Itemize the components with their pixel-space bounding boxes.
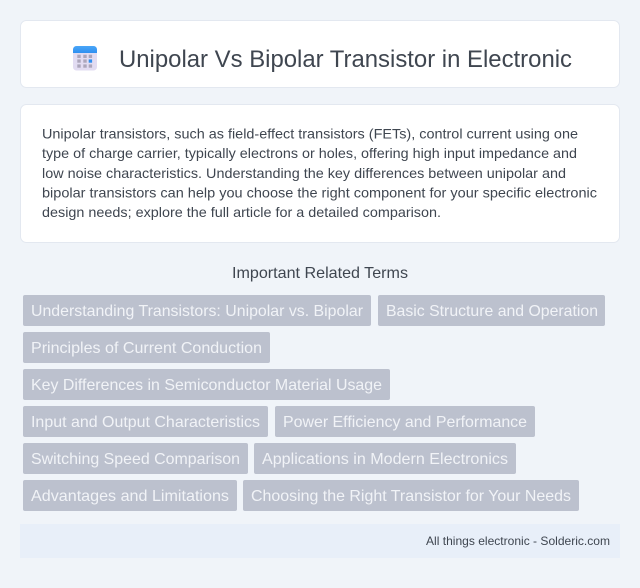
- panel: title card: [20, 20, 620, 88]
- intro paragraph: design needs; explore the full article for a detailed comparison.: [42, 204, 441, 220]
- title: Unipolar Vs Bipolar Transistor in Electronic: [119, 46, 572, 73]
- chip: Principles of Current Conduction: [31, 340, 262, 357]
- footer: [20, 524, 620, 558]
- intro paragraph: low noise characteristics. Understanding the key differences between unipolar and: [42, 165, 566, 181]
- chip: Advantages and Limitations: [31, 488, 229, 505]
- panel: intro text: [20, 104, 620, 242]
- chip: [275, 406, 535, 437]
- chip: [254, 443, 516, 474]
- chip: Understanding Transistors: Unipolar vs. Bipolar: [31, 303, 364, 320]
- chip: [23, 369, 390, 400]
- chip: Applications in Modern Electronics: [262, 451, 508, 468]
- intro paragraph: type of charge carrier, typically electrons or holes, offering high input impedance and: [42, 145, 577, 161]
- chip: Choosing the Right Transistor for Your Needs: [251, 488, 571, 505]
- intro paragraph: Unipolar transistors, such as field-effect transistors (FETs), control current using one: [42, 126, 578, 142]
- intro paragraph: [42, 126, 597, 220]
- chip: [23, 332, 270, 363]
- icon: calendar grid: [73, 46, 97, 70]
- chip: [23, 480, 237, 511]
- chip: Power Efficiency and Performance: [283, 414, 527, 431]
- chip: Input and Output Characteristics: [31, 414, 260, 431]
- chip: [23, 295, 371, 326]
- intro paragraph: bipolar transistors can help you choose the right component for your specific electronic: [42, 184, 597, 200]
- chip: [23, 443, 248, 474]
- chip: [23, 406, 268, 437]
- chip: [243, 480, 579, 511]
- heading: related terms: Important Related Terms: [232, 265, 408, 282]
- chip: [378, 295, 605, 326]
- footer: All things electronic - Solderic.com: [426, 534, 610, 548]
- chip group: related terms: [23, 295, 605, 511]
- chip: Basic Structure and Operation: [386, 303, 598, 320]
- chip: Switching Speed Comparison: [31, 451, 240, 468]
- chip: Key Differences in Semiconductor Material Usage: [31, 377, 382, 394]
